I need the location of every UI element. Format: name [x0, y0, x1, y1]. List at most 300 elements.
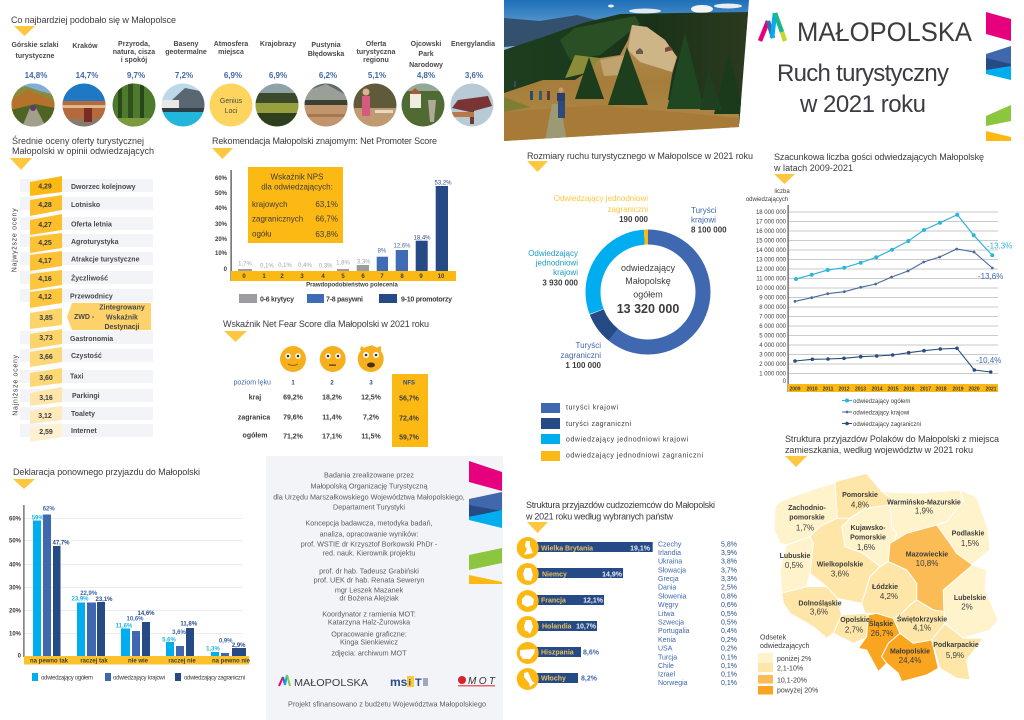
fear score table: ogółem [243, 432, 267, 440]
rating values: 2,59 [39, 429, 53, 436]
panel: domestic arrivals map [758, 434, 999, 694]
heading: return declaration: Deklaracja ponownego przyjazdu do Małopolski [13, 467, 200, 477]
map labels: 1,9% [915, 506, 933, 516]
fear score table: 72,4% [399, 416, 420, 422]
map legend: 10,1-20% [777, 678, 807, 684]
callout: ZWD index: Destynacji [104, 324, 140, 331]
marker triangle [13, 479, 35, 489]
other countries list: Ukraina [658, 558, 682, 566]
attraction labels: Krajobrazy [260, 41, 296, 48]
other countries list: Irlandia [658, 550, 681, 557]
main title: Ruch turystyczny [777, 60, 949, 87]
NPS bar chart: 0,1% [278, 263, 292, 269]
photo: forest [112, 83, 156, 127]
map labels: Lubuskie [780, 553, 810, 560]
donut centre label: Małopolskę [625, 276, 671, 286]
attraction percentages: 6,9% [224, 71, 242, 80]
marker triangle [224, 331, 247, 342]
return bar chart: 2,9% [232, 643, 246, 649]
map labels: pomorskie [789, 514, 825, 522]
callout: ZWD index: Zintegrowany [99, 304, 145, 312]
map labels: Lubelskie [954, 595, 986, 602]
rating values: 3,73 [39, 335, 53, 342]
credits text: Departament Turystyki [333, 502, 405, 512]
other countries list [658, 542, 737, 687]
line chart: 2 000 000 [759, 362, 787, 368]
map labels: Małopolskie [890, 648, 930, 656]
donut legend: odwiedzający jednodniowi zagraniczni [566, 452, 703, 460]
fear score table: 7,2% [363, 414, 380, 422]
attraction percentages: 5,1% [368, 71, 386, 80]
return bar chart: raczej tak [80, 658, 108, 664]
top countries bars: 12,1% [583, 598, 604, 604]
map labels: 5,9% [946, 651, 964, 660]
map labels: 24,4% [899, 656, 921, 665]
credits text: red. nauk. Kierownik projektu [323, 548, 415, 558]
rating names: Parkingi [72, 393, 100, 400]
other countries list: Chile [658, 663, 674, 670]
marker triangle [14, 26, 35, 36]
map labels: 4,1% [913, 624, 931, 632]
fear score table: 79,6% [283, 414, 304, 422]
line chart: 2009 [789, 386, 801, 392]
attraction percentages: 6,9% [269, 71, 287, 80]
donut labels: Odwiedzający jednodniowi [554, 194, 648, 203]
line chart legend [842, 398, 921, 428]
return bar chart: 5,6% [162, 638, 176, 644]
attraction percentages: 3,6% [465, 71, 483, 80]
other countries list: USA [658, 646, 673, 652]
rating values: 4,12 [38, 294, 52, 301]
logo: MSIT: ms [390, 675, 408, 689]
rating names: Lotnisko [71, 202, 100, 209]
heading: ratings: Średnie oceny oferty turystycznej [12, 135, 144, 146]
map legend: odwiedzających [760, 643, 810, 650]
top countries bars: Holandia [542, 624, 572, 630]
panel: domestic arrivals map: zamieszkania, według województw w 2021 roku [785, 445, 973, 455]
return bar chart: 10% [9, 632, 22, 638]
axis title: odwiedzających [746, 197, 788, 203]
map labels: Łódzkie [872, 584, 898, 591]
donut labels: 8 100 000 [691, 226, 727, 234]
line chart: 2020 [968, 386, 980, 392]
attraction labels: Kraków [72, 43, 98, 50]
donut labels: Odwiedzający [528, 249, 578, 258]
NPS y axis: 30% [215, 222, 228, 228]
top countries bars: Niemcy [542, 572, 567, 578]
attraction labels: Atmosfera [214, 41, 248, 48]
panel: average ratings: Małopolski w opinii odwiedzających [12, 146, 154, 156]
rating names: Internet [71, 428, 97, 435]
circle: Genius Loci: Genius [220, 98, 243, 105]
attraction labels: regionu [363, 57, 389, 64]
photo: mountain trail [11, 83, 55, 127]
return bar chart: 50% [9, 538, 22, 544]
photo: Energylandia [450, 83, 494, 127]
return bar chart: na pewno nie [212, 658, 251, 664]
rating values: 4,29 [38, 184, 52, 190]
map legend: Odsetek [760, 634, 787, 642]
rating names: Dworzec kolejnowy [71, 184, 136, 191]
NPS bar chart: 5 [341, 274, 345, 280]
logo: MOT: MOT [468, 676, 496, 687]
map labels: 0,5% [785, 561, 803, 570]
attraction labels [11, 41, 495, 69]
rating names: Czystość [71, 353, 102, 360]
attraction percentages [25, 71, 483, 80]
heading: tourism volume: Rozmiary ruchu turystycznego w Małopolsce w 2021 roku [527, 151, 753, 161]
line chart: 11 000 000 [756, 276, 787, 282]
attraction labels: Oferta [366, 41, 386, 48]
top countries bars: 14,9% [602, 572, 623, 578]
attraction labels: turystyczne [16, 53, 55, 60]
return bar chart: 40% [9, 562, 22, 568]
other countries list: Izrael [658, 672, 676, 678]
photo: Błędów Desert [304, 83, 348, 127]
rating names: Życzliwość [71, 274, 108, 282]
rating values [38, 184, 53, 436]
panel: visitors line chart: w latach 2009-2021 [773, 163, 853, 173]
fear score table: poziom lęku [234, 380, 271, 386]
line chart: -13,3% [987, 242, 1012, 250]
return bar chart: 3,6% [172, 630, 186, 636]
NPS bar chart: 0,3% [319, 264, 333, 270]
marker triangle [774, 174, 795, 184]
rating row bands [20, 179, 153, 437]
fear score table: 2 [330, 380, 334, 386]
map legend: 2,1-10% [777, 666, 803, 672]
panel: tourism volume [527, 151, 753, 461]
other countries list: 3,7% [721, 568, 737, 574]
fear score table: 71,2% [283, 434, 304, 440]
other countries list: 3,9% [721, 550, 737, 557]
other countries list: 0,4% [721, 628, 737, 635]
NPS bar chart: 10 [438, 274, 445, 280]
map labels: 2% [961, 602, 973, 612]
NPS legend: 7-8 pasywni [326, 296, 363, 304]
NPS bar chart: 3,3% [357, 260, 371, 266]
top countries bars: Francja [541, 598, 566, 604]
NPS y axis: 10% [215, 251, 228, 257]
return chart legend: odwiedzający ogółem [41, 676, 93, 682]
NPS bar chart: 0,1% [260, 264, 274, 270]
credits text: Koncepcja badawcza, metodyka badań, [305, 518, 433, 528]
vertical label: lowest ratings: Najniższe oceny [12, 354, 20, 416]
return bar chart: 59% [32, 516, 44, 522]
rating values: 3,66 [39, 354, 53, 361]
panel: Net Fear Score [223, 319, 429, 447]
logo: MSIT [390, 675, 428, 689]
attraction percentages: 14,7% [76, 71, 98, 80]
map labels: 2,7% [845, 626, 863, 634]
logo: Małopolska small: MAŁOPOLSKA [294, 677, 368, 689]
other countries list: Szwecja [658, 620, 684, 626]
other countries list: 2,5% [721, 584, 737, 592]
return bar chart [9, 505, 251, 664]
NPS legend: 9-10 promotorzy [401, 296, 452, 304]
panel: return declaration [9, 467, 251, 682]
donut labels [528, 194, 727, 370]
attraction labels: Przyroda, [118, 41, 150, 48]
other countries list: 3,3% [721, 576, 737, 583]
rating values: 3,85 [39, 315, 53, 322]
attraction labels: Ojcowski [411, 41, 441, 48]
icon: worried face [320, 346, 346, 372]
line chart: 6 000 000 [759, 324, 787, 330]
line chart: 2017 [920, 386, 931, 392]
logo: MSIT: T [415, 677, 422, 689]
rating values: 4,17 [38, 258, 52, 265]
heading: visitors: Szacunkowa liczba gości odwiedzających Małopolskę [774, 152, 984, 162]
line chart: 4 000 000 [759, 343, 787, 349]
top countries bars [517, 537, 653, 690]
donut centre label [617, 263, 679, 316]
fear score table [234, 380, 420, 442]
donut legend: turyści krajowi [566, 404, 618, 412]
decorative ribbons: credits [469, 461, 502, 584]
NPS bar chart: 4 [321, 274, 325, 280]
map of voivodeships [774, 473, 998, 682]
return bar chart: 23,9% [71, 596, 89, 602]
credits text: Opracowanie graficzne: [331, 630, 407, 638]
top countries bars: Włochy [541, 676, 566, 682]
NPS bar chart: 1 [262, 274, 266, 280]
line chart: 0 [783, 379, 787, 385]
fear score table: 1 [291, 380, 295, 386]
rating names: Przewodnicy [70, 294, 113, 300]
vertical label: highest ratings: Najwyższe oceny [12, 208, 18, 272]
credits text: Kinga Sienkiewicz [340, 638, 398, 646]
fear score table: 56,7% [399, 396, 420, 402]
callout: NPS values: ogółu [252, 230, 272, 238]
rating names: Toalety [71, 411, 95, 418]
line chart [756, 205, 1012, 392]
attraction labels: Baseny [174, 41, 199, 48]
rating values: 3,60 [39, 375, 53, 382]
other countries list: Węgry [658, 602, 679, 609]
logo: Małopolska small [279, 675, 368, 689]
map labels: 3,6% [831, 570, 849, 578]
map labels: Mazowieckie [906, 552, 948, 558]
return bar chart: 22,9% [80, 591, 98, 597]
line chart: 7 000 000 [759, 314, 787, 320]
return bar chart: 11,6% [116, 624, 133, 630]
other countries list: 0,2% [721, 646, 737, 652]
donut centre label: ogółem [633, 290, 663, 300]
rating values: 3,12 [38, 413, 52, 420]
line chart: 13 000 000 [756, 258, 787, 264]
map labels: Podkarpackie [933, 642, 979, 649]
return bar chart: 0 [18, 654, 22, 660]
other countries list: 0,2% [721, 637, 737, 644]
other countries list: Kenia [658, 637, 676, 644]
return chart legend: odwiedzający krajowi [113, 676, 165, 682]
line chart: -13,6% [978, 272, 1003, 281]
attraction percentages: 9,7% [127, 71, 145, 80]
NPS bar chart: 3 [300, 274, 304, 280]
line chart: 17 000 000 [756, 220, 787, 226]
rating values: 3,16 [39, 395, 53, 402]
return bar chart: 10,6% [126, 616, 144, 622]
return bar chart: 60% [9, 516, 22, 522]
donut centre label: 13 320 000 [617, 302, 679, 316]
rating names: Atrakcje turystyczne [71, 256, 140, 264]
rating values: 4,27 [38, 222, 52, 229]
NPS y axis: 20% [215, 237, 228, 243]
fear score table: NFS [403, 380, 415, 386]
return bar chart: 20% [9, 608, 22, 614]
line chart: 1 000 000 [759, 372, 787, 378]
callout: NPS values [248, 167, 343, 243]
fear score table: 17,1% [322, 434, 343, 440]
fear score table: zagranica [238, 414, 270, 422]
photo: Ojców National Park [401, 83, 445, 127]
line chart: 2019 [952, 386, 964, 392]
donut labels: Turyści [576, 341, 601, 350]
line chart: 14 000 000 [756, 248, 787, 254]
callout: NPS values: Wskaźnik NPS [271, 172, 323, 182]
attraction labels: Górskie szlaki [11, 42, 59, 49]
donut labels: zagraniczni [561, 351, 601, 360]
other countries list: Słowacja [658, 568, 686, 574]
icon: scared face [358, 345, 384, 372]
attraction labels: natura, cisza [113, 49, 155, 56]
NPS bar chart: Prawdopodobieństwo polecenia [306, 282, 398, 288]
other countries list: Turcja [658, 654, 677, 662]
attraction labels: Pustynia [311, 42, 341, 49]
donut chart [593, 237, 703, 347]
marker triangle [10, 158, 32, 170]
map labels: Pomorskie [850, 534, 886, 542]
line chart: -10,4% [976, 356, 1001, 365]
other countries list: Czechy [658, 542, 682, 548]
other countries list: 0,5% [721, 620, 737, 626]
callout: ZWD index: ZWD - [74, 314, 95, 321]
NPS bar chart: 8% [378, 248, 387, 254]
rating names: Taxi [70, 374, 84, 380]
line chart legend: odwiedzający krajowi [853, 410, 909, 416]
line chart: 2010 [806, 386, 818, 392]
line chart: 5 000 000 [759, 334, 787, 340]
line chart: 12 000 000 [756, 267, 787, 273]
axis title [746, 189, 790, 203]
donut centre label: odwiedzający [621, 263, 676, 273]
map labels: Podlaskie [952, 530, 984, 538]
credits text: Koordynator z ramienia MOT: [322, 610, 416, 618]
rating names: Gastronomia [70, 336, 113, 343]
fear score table: 3 [369, 380, 373, 386]
logo: Małopolska: MAŁOPOLSKA [797, 17, 972, 47]
map labels: Śląskie [869, 619, 893, 628]
map labels: 1,7% [796, 524, 814, 532]
NPS bar chart: 1,8% [336, 260, 350, 266]
fear score table: kraj [249, 394, 261, 402]
map legend: powyżej 20% [777, 688, 818, 694]
donut labels: 3 930 000 [542, 278, 579, 288]
credits text: analiza, opracowanie wyników: [320, 530, 418, 538]
map labels: 4,8% [851, 500, 869, 510]
credits text [273, 470, 465, 658]
map labels: 3,6% [810, 608, 828, 616]
fear score table: 69,2% [283, 394, 304, 402]
line chart: 3 000 000 [759, 352, 787, 358]
return chart legend [32, 673, 245, 682]
other countries list: 0,1% [721, 654, 737, 662]
line chart: 16 000 000 [756, 229, 787, 235]
NPS bar chart: 18,4% [413, 236, 431, 242]
other countries list: 0,8% [721, 594, 737, 600]
line chart: 2021 [985, 386, 997, 392]
return bar chart: 23,1% [95, 597, 113, 603]
attraction percentages: 6,2% [319, 71, 337, 80]
other countries list: Dania [658, 584, 676, 592]
line chart: 9 000 000 [759, 296, 787, 302]
line chart legend: odwiedzający ogółem [853, 399, 910, 405]
marker triangle [212, 148, 233, 159]
other countries list: Słowenia [658, 594, 687, 600]
panel: credits [266, 456, 503, 720]
circle: Genius Loci: Loci [225, 108, 238, 115]
marker triangle [527, 522, 548, 533]
NPS bar chart: 2 [280, 274, 284, 280]
NPS bar chart: 1,7% [238, 262, 252, 268]
decorative ribbons: top right [986, 12, 1011, 141]
NPS y axis: 60% [215, 176, 228, 182]
top countries bars: Wielka Brytania [541, 546, 593, 552]
NPS bar chart: 6 [361, 274, 365, 280]
map labels: 4,2% [880, 592, 898, 601]
NPS bar chart [231, 180, 456, 288]
photo: regional offer [353, 83, 397, 127]
map labels: Warmińsko-Mazurskie [887, 500, 961, 506]
NPS legend [239, 294, 452, 304]
line chart: 2013 [855, 386, 866, 392]
callout: NPS values: 63,8% [315, 230, 338, 239]
attraction labels: Energylandia [451, 41, 495, 48]
top countries bars: 10,7% [576, 624, 597, 630]
attraction labels: Narodowy [409, 62, 443, 69]
callout: ZWD index [67, 303, 151, 331]
NPS bar chart: 0,4% [298, 263, 312, 269]
map legend: poniżej 2% [777, 656, 811, 663]
other countries list: Grecja [658, 576, 679, 583]
circle: Genius Loci [210, 84, 252, 126]
map labels: Dolnośląskie [798, 600, 842, 608]
line chart: 2018 [935, 386, 947, 392]
marker triangle [527, 161, 548, 172]
fear score table: 18,2% [322, 394, 343, 402]
NPS y axis: 40% [215, 206, 228, 212]
map labels: 26,7% [871, 629, 893, 638]
logo mark [760, 13, 785, 41]
rating names [70, 184, 140, 435]
donut legend: odwiedzający jednodniowi krajowi [566, 436, 688, 444]
NPS bar chart: 12,6% [393, 244, 411, 250]
logo: MSIT: i [408, 678, 411, 688]
return chart legend: odwiedzający zagraniczni [184, 676, 245, 682]
panel: visitors line chart [746, 152, 1012, 428]
NPS y axis [215, 170, 232, 281]
axis title: liczba [774, 189, 790, 195]
attraction labels: turystyczna [357, 49, 396, 56]
NFS highlight column [392, 374, 428, 447]
donut labels: Turyści [691, 206, 717, 215]
callout: ZWD index: Wskaźnik [106, 314, 138, 322]
other countries list: 0,1% [721, 672, 737, 678]
panel: average ratings [10, 135, 154, 442]
donut labels: krajowi [691, 216, 716, 224]
line chart: 18 000 000 [756, 210, 787, 216]
